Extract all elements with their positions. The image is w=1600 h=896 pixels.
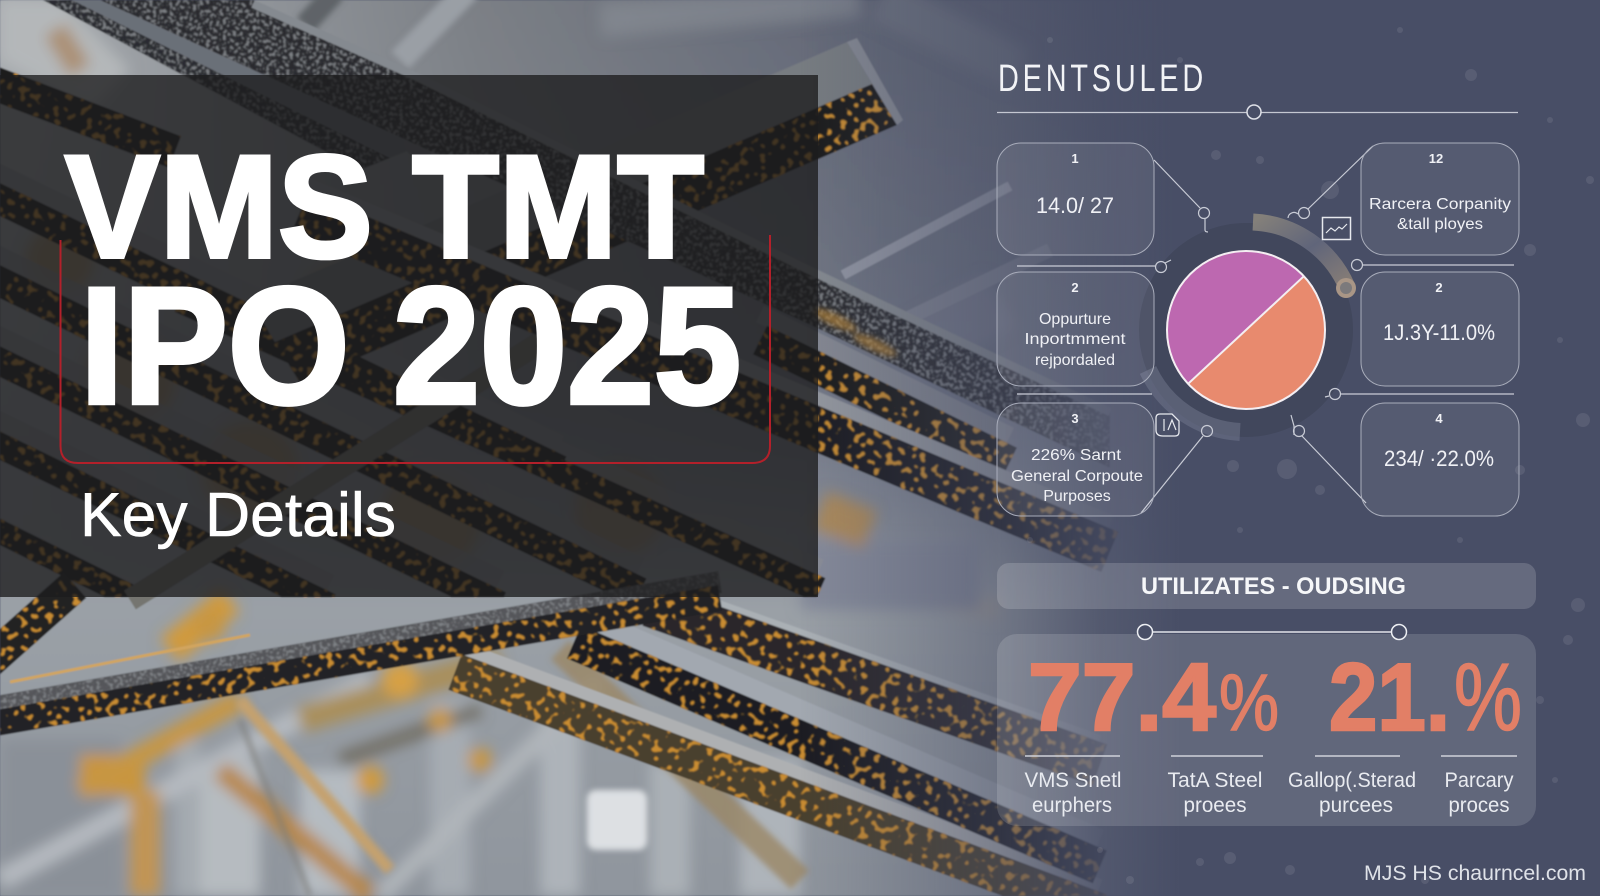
rod D	[300, 186, 1110, 552]
panel: box 3 right: 4	[1435, 411, 1443, 426]
rod A	[100, 0, 1110, 468]
rod B	[72, 0, 420, 158]
stat: 21.%	[1329, 644, 1522, 751]
icon: line chart	[1322, 218, 1350, 240]
footer url: MJS HS chaurncel.com	[1364, 862, 1586, 885]
stat: 21.%: %	[1454, 644, 1522, 751]
panel: box 1 right	[1361, 143, 1519, 255]
stat labels: Gallop(.Sterad	[1288, 769, 1416, 792]
panel: percentages	[997, 624, 1536, 826]
heading: right panel: DENTSULED	[998, 58, 1207, 100]
panel: box 1: 1	[1071, 151, 1079, 166]
decorative bokeh dots	[1027, 27, 1594, 884]
panel: box 2 left: rejpordaled	[1035, 352, 1115, 369]
rod E ascending with cut end	[250, 38, 903, 383]
icon: document	[1156, 414, 1179, 436]
panel: box 3 right: 234/ ·22.0%	[1384, 446, 1494, 471]
panel: box 3 right	[1361, 403, 1519, 516]
stat labels: eurphers	[1032, 794, 1112, 817]
panel: box 1 right: &tall ployes	[1397, 216, 1483, 233]
panel: box 2 right: 1J.3Y-11.0%	[1383, 320, 1495, 345]
fade overlay: slate right side	[800, 0, 1600, 896]
panel: box 3 left: Purposes	[1043, 488, 1111, 505]
stat: 77.4%: 77.4	[1028, 644, 1216, 751]
panel: box 2 left: Inportmment	[1024, 331, 1126, 348]
panel: box 1: 14.0/ 27	[1036, 193, 1114, 218]
heading: right panel	[997, 58, 1518, 119]
title: VMS TMT	[65, 125, 704, 288]
pie chart	[1167, 251, 1325, 409]
connectors and nodes	[1017, 146, 1514, 513]
slider connector	[1138, 624, 1406, 640]
panel: box 1	[997, 143, 1154, 255]
stat labels: TatA Steel	[1168, 769, 1262, 792]
panel: box 3 left: General Corpoute	[1011, 468, 1143, 485]
stat labels: proees	[1184, 794, 1246, 817]
panel: utilization heading bar	[997, 563, 1536, 609]
panel: box 1 right: 12	[1429, 151, 1443, 166]
hub decoration: arcs behind pie	[1148, 222, 1356, 432]
stat: 21.%: 21.	[1329, 644, 1450, 751]
panel: box 3 left: 3	[1071, 411, 1079, 426]
panel: box 2 right	[1361, 272, 1519, 386]
stat labels: Parcary	[1444, 769, 1514, 792]
left dark title panel	[0, 75, 818, 597]
panel: box 2 left	[997, 272, 1154, 386]
subtitle: Key Details	[80, 481, 396, 550]
warm tones behind the title panel	[26, 226, 94, 294]
panel: box 2 left: Oppurture	[1039, 311, 1111, 328]
panel: box 3 left: 226% Sarnt	[1031, 447, 1122, 464]
stat labels: VMS Snetl	[1024, 769, 1122, 792]
stat labels: proces	[1448, 794, 1510, 817]
panel: box 1 right: Rarcera Corpanity	[1369, 196, 1511, 213]
panel: utilization heading bar: UTILIZATES - OUDSING	[1141, 573, 1406, 600]
title	[65, 125, 741, 439]
title: IPO 2025	[80, 254, 741, 439]
red frame around title	[60, 235, 770, 463]
stat labels: purcees	[1319, 794, 1393, 817]
stat: 77.4%: %	[1219, 658, 1279, 747]
background photo: steel rods with orange speckle	[0, 0, 1125, 896]
panel: box 2 right: 2	[1435, 280, 1443, 295]
stat labels	[1024, 756, 1517, 817]
rods bottom	[0, 582, 1100, 896]
panel: box 3 left	[997, 403, 1154, 516]
panel: box 2 left: 2	[1071, 280, 1079, 295]
